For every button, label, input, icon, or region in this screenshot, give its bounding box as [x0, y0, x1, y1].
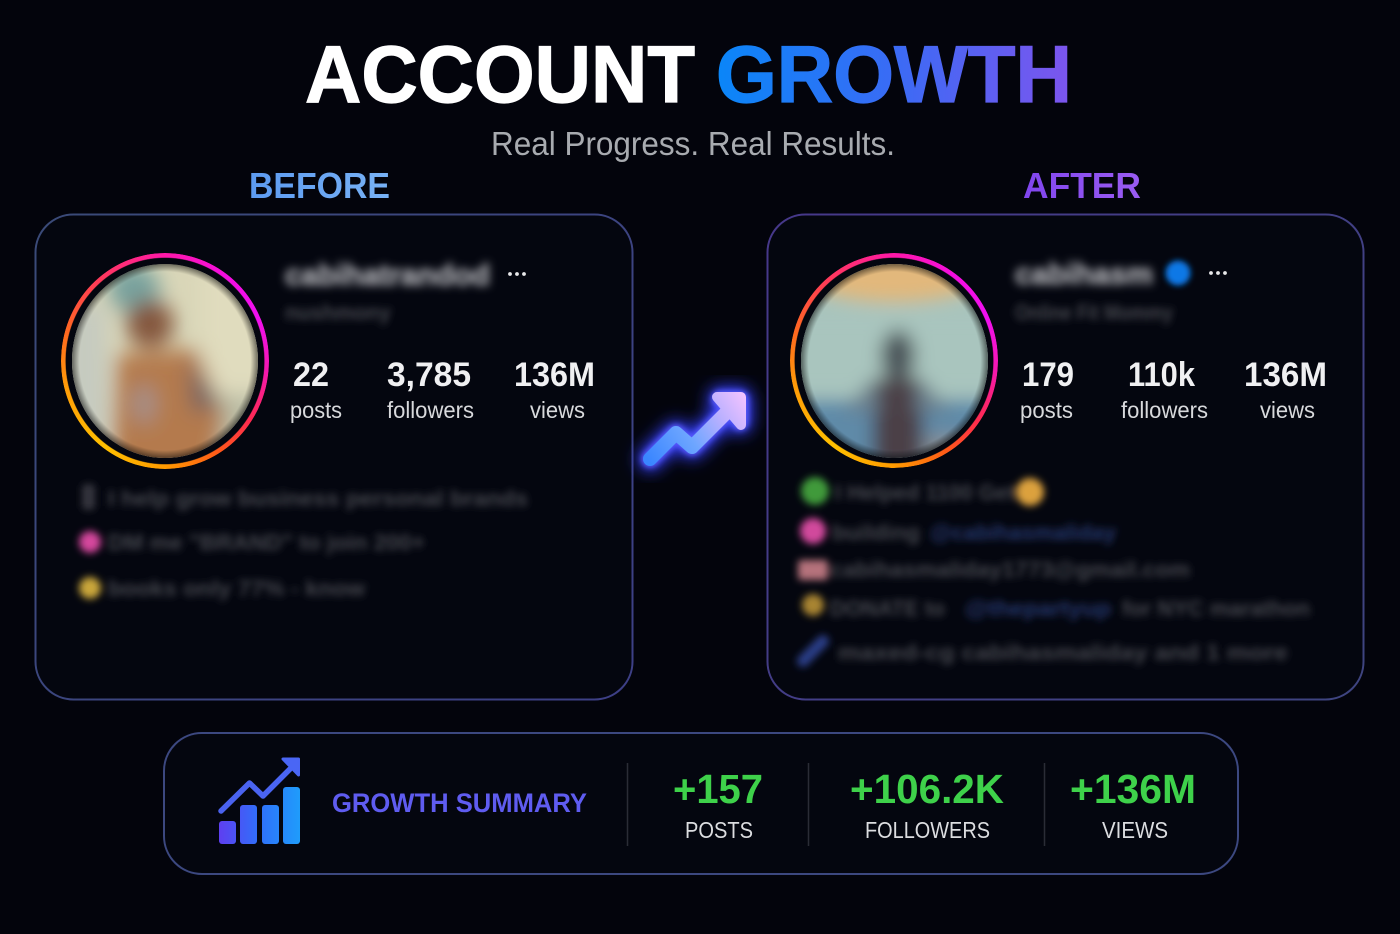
blurred bio: building: [832, 520, 920, 545]
metric: posts: POSTS: [685, 817, 753, 843]
arrow: growth between panels: [650, 397, 741, 459]
stats: posts: 22: [293, 356, 329, 394]
blurred username: cabihatrandod: [285, 259, 490, 292]
title: ACCOUNT: [305, 30, 695, 120]
stats: posts: [290, 356, 342, 423]
metric: followers: FOLLOWERS: [865, 817, 990, 843]
subtitle: Real Progress. Real Results.: [491, 125, 895, 162]
stats: followers: 3,785: [387, 356, 471, 394]
blurred bio: [798, 477, 1310, 665]
options dots: [508, 272, 526, 276]
avatar: before profile: [61, 253, 269, 469]
metric: views: +136M: [1070, 766, 1196, 812]
blurred bio: for NYC marathon: [1122, 596, 1310, 621]
panel: growth summary: [164, 733, 1238, 874]
verified badge: [1166, 260, 1190, 286]
blurred bio: cabihasmaliday1773@gmail.com: [830, 557, 1190, 582]
stats: posts: 179: [1022, 356, 1074, 394]
metric: posts: +157: [673, 766, 763, 812]
metric: views: VIEWS: [1102, 817, 1168, 843]
stats: followers: [1121, 356, 1208, 423]
blurred bio: books only 77% - know: [108, 576, 366, 601]
blurred bio: I Helped 1100 Get: [835, 480, 1016, 505]
blurred display name: Online Fit Mommy: [1015, 300, 1174, 325]
title: GROWTH: [716, 30, 1072, 120]
stats: posts: [1020, 356, 1074, 423]
heading: after: AFTER: [1023, 165, 1141, 206]
blurred bio: [79, 484, 528, 601]
stats: followers: [387, 356, 474, 423]
stats: views: 136M: [1244, 356, 1327, 394]
blurred bio: DM me "BRAND" to join 200+: [108, 530, 425, 555]
blurred bio: @thepartyup: [965, 596, 1111, 621]
options dots: [1209, 271, 1227, 275]
label: growth summary: GROWTH SUMMARY: [332, 788, 587, 818]
icon: growth chart: [219, 759, 300, 844]
avatar: after profile: [790, 253, 998, 468]
stats: posts: posts: [290, 397, 342, 423]
stats: views: [1244, 356, 1327, 423]
blurred display name: nushmony: [285, 300, 392, 325]
title: [305, 30, 1072, 120]
blurred username: cabihasm: [1015, 258, 1153, 291]
metric: views: [1070, 766, 1196, 843]
blurred bio: @cabihasmaliday: [930, 520, 1117, 545]
metric: posts: [673, 766, 763, 843]
stats: views: views: [530, 397, 585, 423]
stats: views: 136M: [514, 356, 595, 394]
blurred bio: maxed-cg cabihasmaliday and 1 more: [838, 640, 1288, 665]
stats: followers: 110k: [1128, 356, 1195, 394]
panel: after profile: [768, 214, 1364, 700]
blurred bio: DONATE to: [830, 596, 945, 621]
blurred bio: I help grow business personal brands: [108, 486, 528, 511]
metric: followers: [850, 766, 1004, 843]
stats: views: views: [1260, 397, 1315, 423]
stats: views: [514, 356, 595, 423]
stats: posts: posts: [1020, 397, 1073, 423]
stats: followers: followers: [387, 397, 474, 423]
stats: followers: followers: [1121, 397, 1208, 423]
heading: before: BEFORE: [249, 165, 390, 206]
panel: before profile: [36, 214, 632, 700]
metric: followers: +106.2K: [850, 766, 1004, 812]
